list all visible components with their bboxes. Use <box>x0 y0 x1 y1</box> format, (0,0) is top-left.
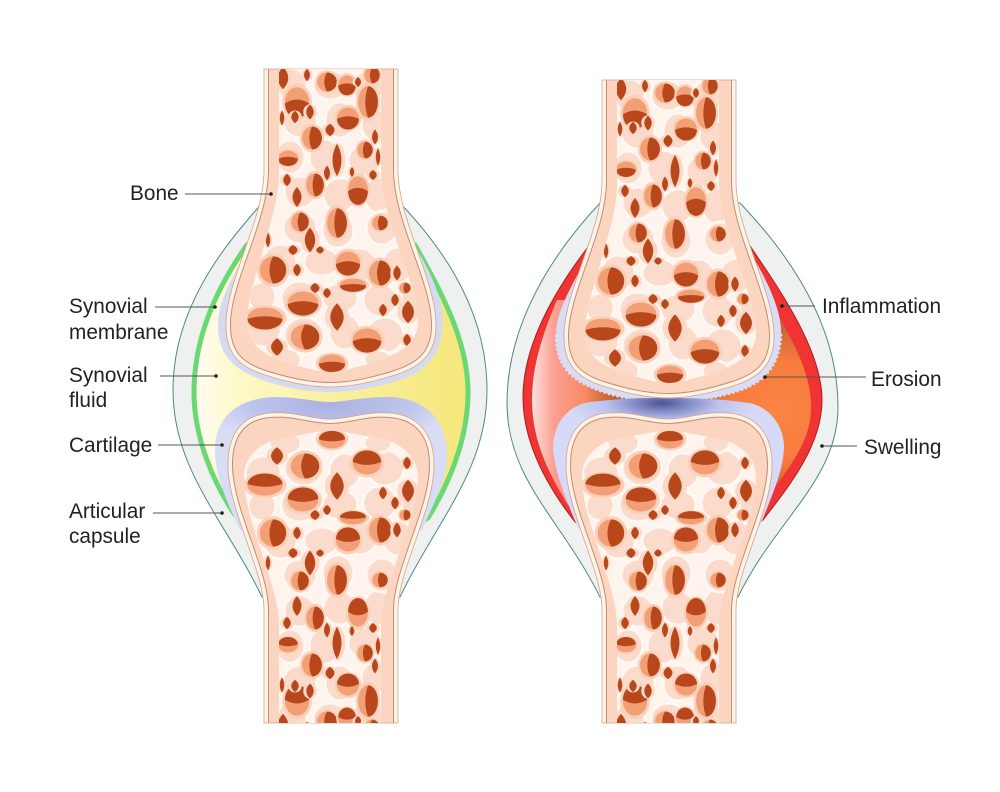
lower bone, eroded <box>566 413 772 743</box>
label: Synovial membrane: membrane <box>69 321 168 344</box>
label: Synovial fluid: Synovial <box>69 364 148 387</box>
label: Swelling <box>820 436 941 459</box>
upper cartilage <box>218 243 443 392</box>
upper bone, eroded <box>564 71 774 398</box>
pale fluid edge <box>532 300 620 505</box>
label: Cartilage: Cartilage <box>69 434 152 457</box>
label: Inflammation: Inflammation <box>822 295 941 318</box>
healthy joint diagram <box>173 60 487 743</box>
label: Erosion <box>763 368 942 391</box>
inflamed fluid <box>532 300 811 505</box>
label: Articular capsule <box>69 500 224 548</box>
lower cartilage <box>215 397 447 540</box>
label: Articular capsule: capsule <box>69 525 141 548</box>
label: Synovial membrane: Synovial <box>69 295 148 318</box>
synovial membrane and fluid <box>194 245 468 535</box>
lower bone <box>228 413 434 743</box>
label: Synovial membrane <box>69 295 217 344</box>
label: Synovial fluid: fluid <box>69 389 107 412</box>
eroded upper cartilage <box>556 254 781 402</box>
inflamed joint diagram <box>507 71 838 743</box>
swollen capsule <box>507 203 838 597</box>
inflamed membrane <box>523 243 822 540</box>
upper bone <box>226 60 436 387</box>
label: Synovial fluid <box>69 364 218 412</box>
eroded lower cartilage <box>553 398 784 540</box>
label: Bone: Bone <box>130 182 179 205</box>
label: Cartilage <box>69 434 224 457</box>
label: Articular capsule: Articular <box>69 500 145 523</box>
label: Swelling: Swelling <box>864 436 941 459</box>
articular capsule <box>173 203 487 597</box>
label: Erosion: Erosion <box>871 368 942 391</box>
label: Bone <box>130 182 273 205</box>
